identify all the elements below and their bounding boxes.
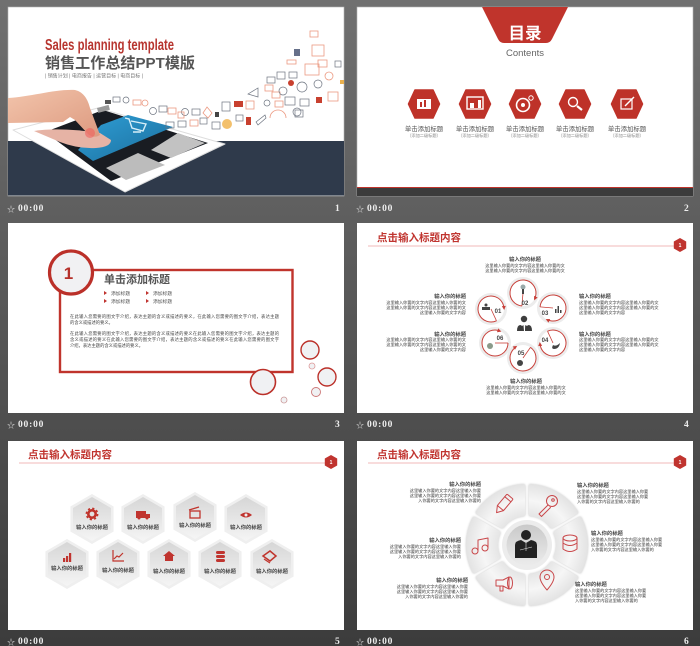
panel: slide 1 cover: [8, 7, 344, 196]
body text: 含义或描述的要义在此输入您需要的图文字介绍，表达主题的含义或描述的要义在此输入您需要的图文字: [70, 336, 279, 343]
hex: bars: 输入你的标题: [51, 564, 84, 572]
icon: location pin: [540, 570, 554, 590]
cycle nodes: [474, 277, 570, 376]
text block: right: 输入你的标题: [591, 529, 623, 537]
text block: lower right: 输入你的标题: [579, 330, 611, 338]
subtitle tags: | 销售计划 | 电商报告 | 运营目标 | 电商目标 |: [45, 72, 143, 80]
text block: top: [485, 255, 566, 274]
hex: truck: [121, 494, 165, 544]
text block: left: 输入你的标题: [429, 536, 462, 544]
text block: right: [591, 529, 662, 553]
radial segments: [451, 473, 603, 617]
footer: slide 1: 00:00: [18, 204, 44, 214]
text block: lower left: [397, 576, 469, 600]
text block: top: 这里输入你要的文字内容这里输入你要的文: [485, 267, 566, 274]
text block: left: 这里输入你要的文字内容这里输入你要: [390, 548, 461, 555]
item 1: （添加二级标题）: [407, 132, 441, 139]
item 3: [506, 90, 545, 139]
text block: lower right: [579, 330, 659, 353]
icon: pencil: [494, 494, 513, 515]
footer: slide 5: [7, 637, 341, 646]
header rule and badge: 1: [679, 460, 682, 466]
text block: upper left: 这里输入你要的文字内容这里输入你要的文: [386, 304, 467, 311]
panel: slide 4 cycle diagram: [357, 223, 693, 413]
hex: line chart: 输入你的标题: [102, 566, 135, 574]
item 2: [456, 90, 495, 139]
text block: top: 这里输入你要的文字内容这里输入你要的文: [485, 262, 566, 269]
hex: box: 输入你的标题: [179, 521, 212, 529]
text block: bottom: [486, 377, 567, 396]
footer: slide 2: 00:00: [367, 204, 393, 214]
header rule and badge: [368, 238, 686, 252]
item 3: 单击添加标题: [506, 124, 545, 133]
text block: left: [390, 536, 462, 560]
footer: slide 1: [7, 204, 341, 214]
body text: 在此输入您需要的图文字介绍，表达主题的含义或描述的要义，在此输入您需要的图文字介绍，表达主题: [70, 313, 280, 320]
text block: lower left: [386, 330, 467, 353]
text block: lower left: 入你要的文字内容这里输入你要的: [405, 593, 468, 600]
bullet list: [104, 290, 172, 305]
text block: lower right: 输入你的标题: [575, 580, 607, 588]
panel: slide 6 radial diagram: [357, 441, 693, 630]
hex: line chart: [96, 539, 140, 589]
body text: 的含义或描述的要义。: [70, 319, 113, 326]
text block: left: 这里输入你要的文字内容这里输入你要: [390, 543, 461, 550]
heading: 点击输入标题内容: [28, 448, 112, 461]
text block: upper left: [386, 292, 467, 316]
text block: upper left: 这里输入你要的文字内容这里输入你要的文: [386, 299, 467, 306]
text block: upper right: [579, 292, 659, 316]
text block: upper right: 这里输入你要的文字内容这里输入你要的文: [579, 304, 659, 311]
cycle nodes: 03: [542, 311, 549, 317]
text block: lower left: 这里输入你要的文字内容这里输入你要的文: [386, 336, 467, 343]
footer: slide 4: 4: [684, 420, 690, 430]
hex: eye: 输入你的标题: [230, 523, 263, 531]
hex: truck: 输入你的标题: [127, 523, 160, 531]
body text: [70, 313, 280, 349]
hex: database: 输入你的标题: [204, 567, 237, 575]
text block: upper right: 入你要的文字内容这里输入你要的: [577, 498, 640, 505]
subheading: Contents: [506, 48, 544, 59]
text block: upper left: 入你要的文字内容这里输入你要的: [418, 497, 481, 504]
heading: 目录: [508, 24, 542, 43]
icon: music note: [472, 538, 488, 554]
footer: slide 4: ☆: [356, 421, 364, 430]
text block: lower left: 输入你的标题: [436, 576, 469, 584]
footer: slide 3: 00:00: [18, 420, 44, 430]
text block: lower right: 这里输入你要的文字内容这里输入你要: [575, 592, 646, 599]
body text: 在此输入您需要的图文字介绍，表达主题的含义或描述的要义在此输入您需要的图文字介绍，表达主题的: [70, 330, 279, 337]
text block: lower right: 这里输入你要的文字内容这里输入你要的文: [579, 336, 659, 343]
text block: upper right: [577, 481, 648, 505]
icon: megaphone: [496, 577, 512, 591]
hex: box: [173, 492, 217, 542]
item 5: （添加二级标题）: [610, 132, 644, 139]
cycle nodes: 04: [542, 338, 549, 344]
center people icon: [517, 316, 532, 331]
text block: upper right: 这里输入你要的文字内容这里输入你要: [577, 488, 648, 495]
bullet list: 添加标题: [153, 290, 172, 297]
hex: gear: 输入你的标题: [76, 523, 109, 531]
text block: upper left: 输入你的标题: [449, 480, 482, 488]
icon: key: [539, 496, 558, 516]
footer: slide 3: 3: [335, 420, 341, 430]
tablet illustration: [13, 105, 225, 192]
hex: house: [147, 539, 191, 589]
cycle nodes: 01: [495, 309, 502, 315]
panel: slide 5 hexagon grid: [8, 441, 344, 630]
item 5: [608, 90, 647, 139]
text block: upper right: 输入你的标题: [579, 292, 611, 300]
footer: slide 1: 1: [335, 204, 341, 214]
bullet list: 添加标题: [111, 290, 130, 297]
text block: upper right: 这里输入你要的文字内容这里输入你要的文: [579, 299, 659, 306]
text block: lower left: 这里输入你要的文字内容这里输入你要的文: [386, 341, 467, 348]
hand illustration: [8, 90, 111, 148]
hex: bars: [45, 539, 89, 589]
item 1: [405, 90, 444, 139]
heading: 点击输入标题内容: [377, 231, 461, 244]
text block: left: 入你要的文字内容这里输入你要的: [398, 553, 461, 560]
section heading: 单击添加标题: [104, 272, 170, 286]
header rule and badge: [368, 455, 686, 469]
text block: lower left: 输入你的标题: [434, 330, 467, 338]
item 1: 单击添加标题: [405, 124, 444, 133]
footer: slide 4: [356, 420, 690, 430]
title: chinese: 销售工作总结PPT模版: [45, 54, 195, 72]
text block: upper left: [410, 480, 482, 504]
item 2: （添加二级标题）: [458, 132, 492, 139]
hex: house: 输入你的标题: [153, 567, 186, 575]
text block: upper left: 这里输入你要的文字内容这里输入你要: [410, 487, 481, 494]
footer: slide 2: [356, 204, 690, 214]
text block: upper left: 输入你的标题: [434, 292, 467, 300]
bullet list: 添加标题: [111, 298, 130, 305]
text block: lower right: 这里输入你要的文字内容这里输入你要: [575, 587, 646, 594]
text block: lower right: [575, 580, 646, 604]
cycle nodes: 05: [518, 351, 525, 357]
text block: upper left: 这里输入你要的文字内容: [420, 309, 466, 316]
text block: bottom: 这里输入你要的文字内容这里输入你要的文: [486, 384, 567, 391]
header rule and badge: 1: [679, 243, 682, 249]
title: english: Sales planning template: [45, 37, 174, 54]
heading: 点击输入标题内容: [377, 448, 461, 461]
item 4: 单击添加标题: [556, 124, 595, 133]
hex: book: [250, 539, 294, 589]
footer: slide 3: [7, 420, 341, 430]
center businessman icon: [502, 520, 552, 570]
header rule and badge: [19, 455, 337, 469]
text block: lower right: 入你要的文字内容这里输入你要的: [575, 597, 638, 604]
footer: slide 2: 2: [684, 204, 690, 214]
footer: slide 1: ☆: [7, 205, 15, 214]
text block: bottom: 这里输入你要的文字内容这里输入你要的文: [486, 389, 567, 396]
text block: upper right: 输入你的标题: [577, 481, 609, 489]
header rule and badge: 1: [330, 460, 333, 466]
cycle nodes: 02: [522, 301, 529, 307]
bullet list: 添加标题: [153, 298, 172, 305]
body text: 介绍，表达主题的含义或描述的要义。: [70, 342, 143, 349]
panel: slide 3 section: [8, 223, 344, 413]
text block: lower left: 这里输入你要的文字内容这里输入你要: [397, 583, 468, 590]
item 3: （添加二级标题）: [508, 132, 542, 139]
dark base band: [8, 141, 344, 196]
text block: lower right: 这里输入你要的文字内容这里输入你要的文: [579, 341, 659, 348]
footer: slide 2: ☆: [356, 205, 364, 214]
hex: eye: [224, 494, 268, 544]
text block: upper left: 这里输入你要的文字内容这里输入你要: [410, 492, 481, 499]
hex: database: [198, 539, 242, 589]
item 2: 单击添加标题: [456, 124, 495, 133]
item 4: （添加二级标题）: [558, 132, 592, 139]
text block: upper right: 这里输入你要的文字内容这里输入你要: [577, 493, 648, 500]
footer: slide 4: 00:00: [367, 420, 393, 430]
contents banner: [482, 7, 568, 43]
text block: top: 输入你的标题: [509, 255, 542, 263]
number badge: 1: [64, 264, 73, 283]
text block: lower left: 这里输入你要的文字内容: [420, 346, 466, 353]
text block: upper right: 这里输入你要的文字内容: [579, 309, 625, 316]
item 4: [556, 90, 595, 139]
panel: slide 2 contents: [357, 7, 693, 196]
text block: right: 入你要的文字内容这里输入你要的: [591, 546, 654, 553]
cycle nodes: 06: [497, 336, 504, 342]
hex: book: 输入你的标题: [256, 567, 289, 575]
footer: slide 3: ☆: [7, 421, 15, 430]
text block: right: 这里输入你要的文字内容这里输入你要: [591, 541, 662, 548]
content frame: [60, 270, 292, 372]
floating icons cloud: [105, 31, 344, 129]
item 5: 单击添加标题: [608, 124, 647, 133]
icon: database: [563, 535, 577, 552]
text block: bottom: 输入你的标题: [510, 377, 543, 385]
text block: right: 这里输入你要的文字内容这里输入你要: [591, 536, 662, 543]
number badge: [50, 251, 92, 294]
text block: lower right: 这里输入你要的文字内容: [579, 346, 625, 353]
footer: slide 6: [356, 637, 690, 646]
footer bar: [357, 187, 693, 196]
text block: lower left: 这里输入你要的文字内容这里输入你要: [397, 588, 468, 595]
hex: gear: [70, 494, 114, 544]
decorative bubbles: [250, 341, 336, 403]
